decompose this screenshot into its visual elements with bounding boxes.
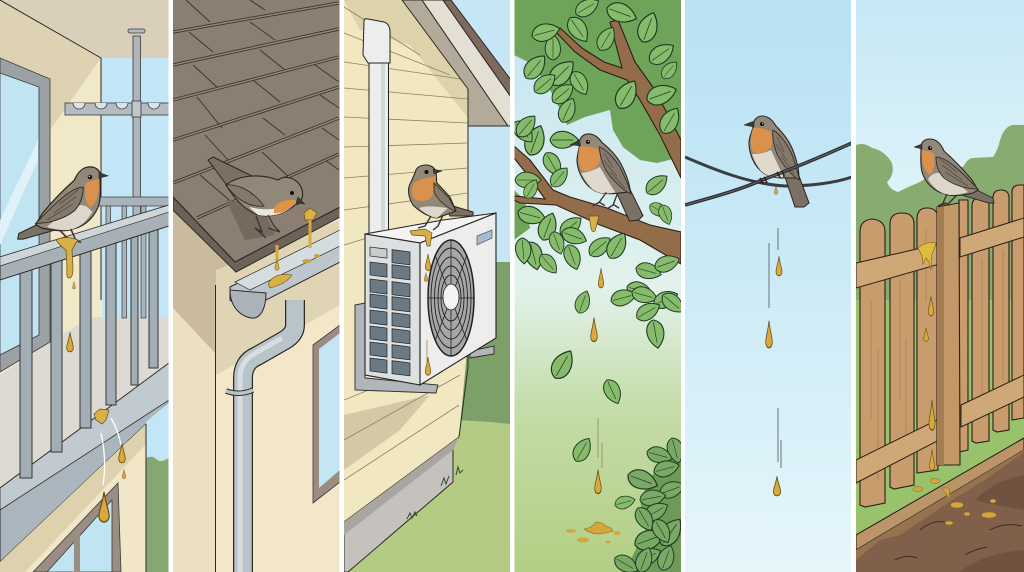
droppings [566, 216, 620, 544]
ac unit [365, 213, 496, 385]
sky gradient [856, 0, 1024, 300]
panel: roof and gutter [173, 0, 340, 572]
walls [173, 190, 340, 572]
canopy [514, 0, 681, 163]
lower wall [0, 424, 146, 572]
bird shadow on roof [226, 200, 275, 240]
balcony floor wall [0, 317, 169, 488]
hedge and lawn [344, 262, 510, 572]
panel: air conditioner [344, 0, 511, 572]
fence boards [860, 185, 1024, 507]
bush [611, 436, 687, 572]
sky gradient [514, 0, 682, 572]
shingle ribs [173, 3, 339, 218]
grass tufts [407, 467, 463, 519]
downpipe [226, 300, 295, 572]
handrail [0, 205, 169, 280]
rear railing [98, 197, 169, 318]
droppings on fence [918, 243, 936, 470]
upper window [0, 58, 50, 372]
balcony slab [0, 363, 169, 562]
balcony ceiling [0, 0, 169, 58]
fence robin [914, 139, 994, 206]
shingle seams [186, 0, 339, 205]
branches [514, 20, 681, 264]
droppings on ac [410, 229, 432, 375]
front balusters [20, 226, 158, 478]
fence rails [856, 218, 1024, 483]
foundation [344, 437, 459, 572]
ac fan [428, 240, 474, 356]
droppings in gutter [268, 208, 320, 288]
bracket [355, 303, 494, 393]
lower wire [685, 157, 852, 186]
robin on railing [18, 167, 108, 243]
upper wire [685, 143, 852, 205]
roof robin [208, 157, 305, 238]
roof soffit [402, 0, 511, 126]
panel: tree branch [509, 0, 688, 572]
hedge [856, 125, 1024, 330]
ac robin [409, 165, 473, 230]
sky [452, 0, 510, 262]
gutter [230, 230, 340, 318]
tree robin [569, 129, 643, 226]
panel: wire [685, 0, 852, 572]
wood grain [871, 230, 1003, 480]
panel: balcony railing [0, 0, 170, 572]
siding wall [344, 0, 468, 522]
side leaf clusters background [514, 190, 530, 240]
ac label plate [477, 230, 492, 245]
falling leaves [547, 289, 637, 511]
wall window [313, 325, 340, 503]
ground grass [856, 300, 1024, 535]
roof [173, 0, 340, 272]
sky view [102, 58, 170, 318]
balcony wall [0, 0, 101, 400]
wire robin [744, 116, 809, 207]
clothes pole and hanger [65, 29, 169, 216]
ac grills [370, 247, 410, 376]
garden edging [856, 438, 1024, 562]
panel: fence and garden [856, 0, 1024, 572]
lower sky and hedge [146, 402, 169, 572]
droppings on ground [913, 478, 996, 525]
fence post [937, 203, 960, 465]
droppings on railing [56, 238, 126, 522]
bird feet on wire [760, 171, 784, 184]
falling droppings [766, 186, 782, 496]
leaves [509, 0, 688, 350]
soil [856, 452, 1024, 572]
lower window [33, 483, 121, 572]
sky gradient [685, 0, 852, 572]
condensate pipe [363, 19, 390, 235]
